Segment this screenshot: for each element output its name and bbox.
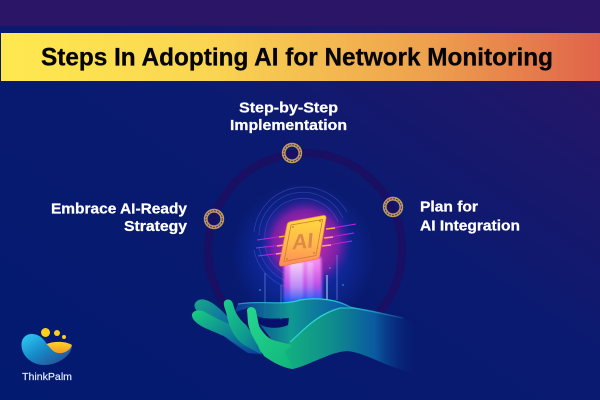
step label: Step-by-Step Implementation: Step-by-Step [239,100,338,116]
logo mark [22,334,72,365]
circuit lines [256,224,356,256]
AI chip illustration [231,183,375,335]
step label: Plan for AI Integration [420,200,520,234]
hand illustration [192,299,425,378]
chip label: AI [290,229,315,255]
step label: Step-by-Step Implementation: Implementation [230,118,347,134]
palm highlights [238,299,403,342]
chip body [279,215,326,266]
finger A [194,299,260,354]
central orbit ring [208,153,402,347]
logo wordmark: ThinkPalm [22,371,72,383]
ThinkPalm logo [22,328,72,383]
step label: Embrace AI-Ready Strategy: Embrace AI-Ready [51,202,187,218]
light beams [283,257,323,312]
step label: Embrace AI-Ready Strategy: Strategy [124,219,187,235]
title banner [1,33,600,81]
sparkles [259,267,344,331]
node marker: right [385,199,401,215]
step label: Plan for AI Integration: AI Integration [420,218,520,234]
upper palm [235,299,403,345]
title: Steps In Adopting AI for Network Monitoring [41,44,553,72]
signal arcs [254,187,347,290]
finger B [192,310,256,354]
node marker: left [206,211,222,227]
chip corner pins [286,220,321,260]
step label: Embrace AI-Ready Strategy [51,202,187,235]
palm gap [258,318,289,328]
step label: Plan for AI Integration: Plan for [420,200,478,216]
step label: Step-by-Step Implementation [230,100,347,134]
main palm [255,308,425,378]
finger C [224,300,262,355]
node marker: top [284,145,300,161]
finger D [247,307,293,369]
